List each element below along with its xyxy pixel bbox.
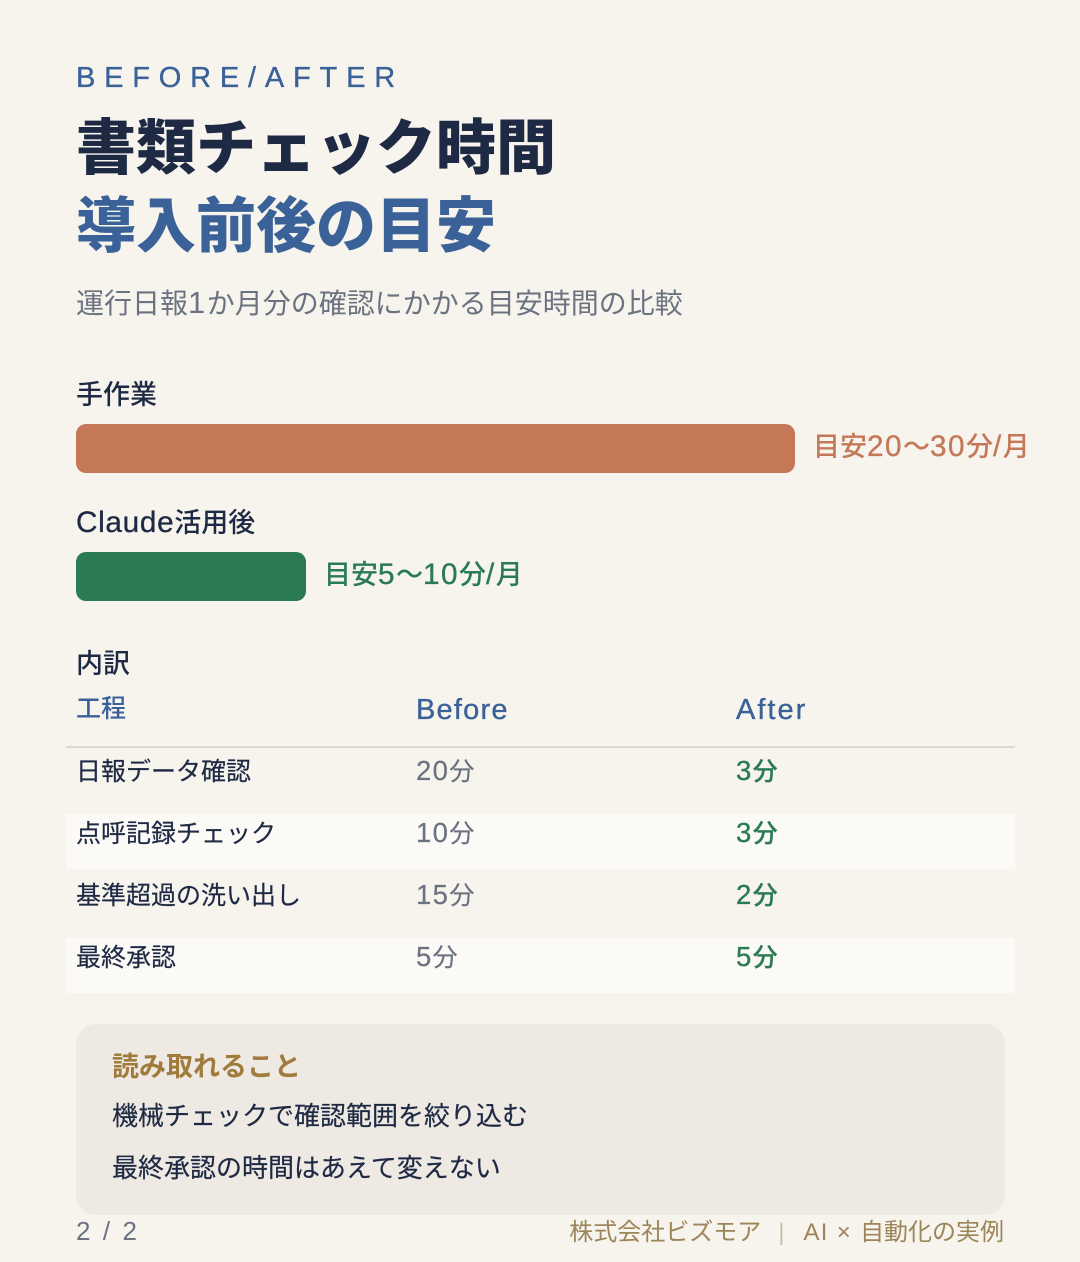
- header: after: After: [736, 694, 807, 726]
- row stripe 2: [66, 814, 1015, 869]
- row stripe 4: [66, 938, 1015, 993]
- bar: Claude: [76, 552, 306, 601]
- row 4 before: 5分: [416, 941, 458, 972]
- row 1 process: 日報データ確認: [76, 758, 251, 786]
- bar: manual: [76, 424, 795, 473]
- row 2 process: 点呼記録チェック: [76, 820, 276, 848]
- row 3 before: 15分: [416, 879, 474, 910]
- callout line 2: 最終承認の時間はあえて変えない: [112, 1153, 501, 1183]
- row 1 after: 3分: [736, 755, 778, 786]
- eyebrow: BEFORE/AFTER: [76, 62, 404, 94]
- bar label: Claude: Claude活用後: [76, 506, 255, 539]
- table header rule: [66, 746, 1015, 748]
- row 4 process: 最終承認: [76, 944, 176, 972]
- row 4 after: 5分: [736, 941, 778, 972]
- bar value: Claude: 目安5〜10分/月: [324, 558, 523, 591]
- title: [76, 115, 556, 260]
- header: process: 工程: [76, 695, 126, 723]
- title line 1: 書類チェック時間: [76, 115, 556, 182]
- footer credit: 株式会社ビズモア | AI × 自動化の実例: [569, 1219, 1004, 1246]
- callout line 1: 機械チェックで確認範囲を絞り込む: [112, 1101, 528, 1131]
- bar label: manual: 手作業: [76, 380, 157, 410]
- breakdown heading: 内訳: [76, 649, 130, 679]
- callout panel: [76, 1024, 1005, 1215]
- header: before: Before: [416, 694, 509, 726]
- subtitle: 運行日報1か月分の確認にかかる目安時間の比較: [76, 285, 683, 320]
- row 1 before: 20分: [416, 755, 474, 786]
- row 3 after: 2分: [736, 879, 778, 910]
- title line 2: 導入前後の目安: [76, 193, 496, 260]
- row 2 after: 3分: [736, 817, 778, 848]
- bar value: manual: 目安20〜30分/月: [813, 430, 1030, 463]
- callout heading: 読み取れること: [112, 1052, 301, 1082]
- page number: 2 / 2: [76, 1216, 140, 1246]
- table: [66, 694, 1015, 972]
- row 2 before: 10分: [416, 817, 474, 848]
- row 3 process: 基準超過の洗い出し: [76, 882, 301, 910]
